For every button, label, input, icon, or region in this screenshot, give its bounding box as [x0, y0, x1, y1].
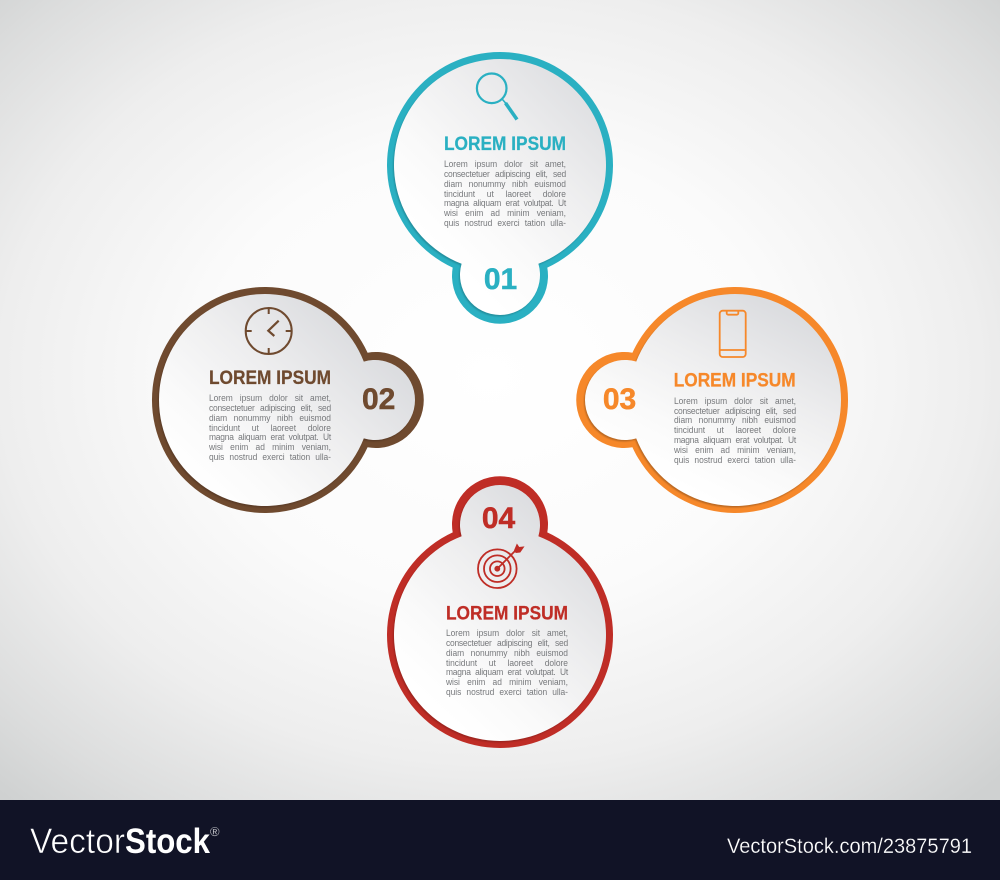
text block: Lorem ipsum dolor sit amet, [674, 396, 795, 407]
icon: smartphone [720, 311, 746, 357]
text block: consectetuer adipiscing elit, sed [444, 169, 566, 180]
logo wordmark: Vector [30, 822, 125, 861]
text block: diam nonummy nibh euismod [209, 413, 331, 424]
icon: clock [246, 308, 292, 354]
text block: consectetuer adipiscing elit, sed [674, 406, 795, 417]
number: 01 [484, 263, 517, 296]
text block: quis nostrud exerci tation ulla- [674, 455, 795, 466]
text block [444, 159, 566, 229]
text block: tincidunt ut laoreet dolore [446, 658, 568, 669]
logo wordmark: Stock [125, 822, 210, 861]
text block: quis nostrud exerci tation ulla- [209, 452, 331, 463]
number: 04 [482, 502, 515, 535]
text block: diam nonummy nibh euismod [446, 648, 568, 659]
number: 02 [362, 383, 395, 416]
text block: Lorem ipsum dolor sit amet, [446, 628, 568, 639]
heading: LOREM IPSUM [444, 134, 566, 155]
logo wordmark: ® [210, 824, 220, 839]
text block: tincidunt ut laoreet dolore [674, 425, 795, 436]
panel: 03 phone [576, 287, 848, 513]
text block: consectetuer adipiscing elit, sed [209, 403, 331, 414]
text block: magna aliquam erat volutpat. Ut [209, 432, 331, 443]
icon: magnifying glass [477, 74, 517, 120]
heading: LOREM IPSUM [446, 603, 568, 624]
text block: consectetuer adipiscing elit, sed [446, 638, 568, 649]
text block: diam nonummy nibh euismod [674, 415, 795, 426]
panel: 02 clock [152, 287, 424, 513]
text block [446, 628, 568, 698]
icon: target with arrow [478, 544, 524, 588]
number: 03 [603, 383, 636, 416]
text block: magna aliquam erat volutpat. Ut [444, 198, 566, 209]
text block [209, 393, 332, 463]
text block: Lorem ipsum dolor sit amet, [444, 159, 566, 170]
text block: quis nostrud exerci tation ulla- [444, 218, 566, 229]
text block: wisi enim ad minim veniam, [674, 445, 795, 456]
text block: tincidunt ut laoreet dolore [209, 423, 331, 434]
logo wordmark [30, 822, 220, 861]
text block: wisi enim ad minim veniam, [209, 442, 331, 453]
text block: wisi enim ad minim veniam, [446, 677, 568, 688]
text block [674, 396, 796, 466]
text block: quis nostrud exerci tation ulla- [446, 687, 568, 698]
text block: Lorem ipsum dolor sit amet, [209, 393, 331, 404]
heading: LOREM IPSUM [209, 368, 331, 389]
panel: 04 target [387, 476, 613, 748]
text block: magna aliquam erat volutpat. Ut [446, 667, 568, 678]
text block: diam nonummy nibh euismod [444, 179, 566, 190]
footer band [0, 800, 1000, 880]
text block: wisi enim ad minim veniam, [444, 208, 566, 219]
text block: magna aliquam erat volutpat. Ut [674, 435, 795, 446]
text block: tincidunt ut laoreet dolore [444, 189, 566, 200]
panel: 01 search [387, 52, 613, 324]
heading: LOREM IPSUM [674, 371, 796, 392]
image id: VectorStock.com/23875791 [727, 835, 972, 858]
